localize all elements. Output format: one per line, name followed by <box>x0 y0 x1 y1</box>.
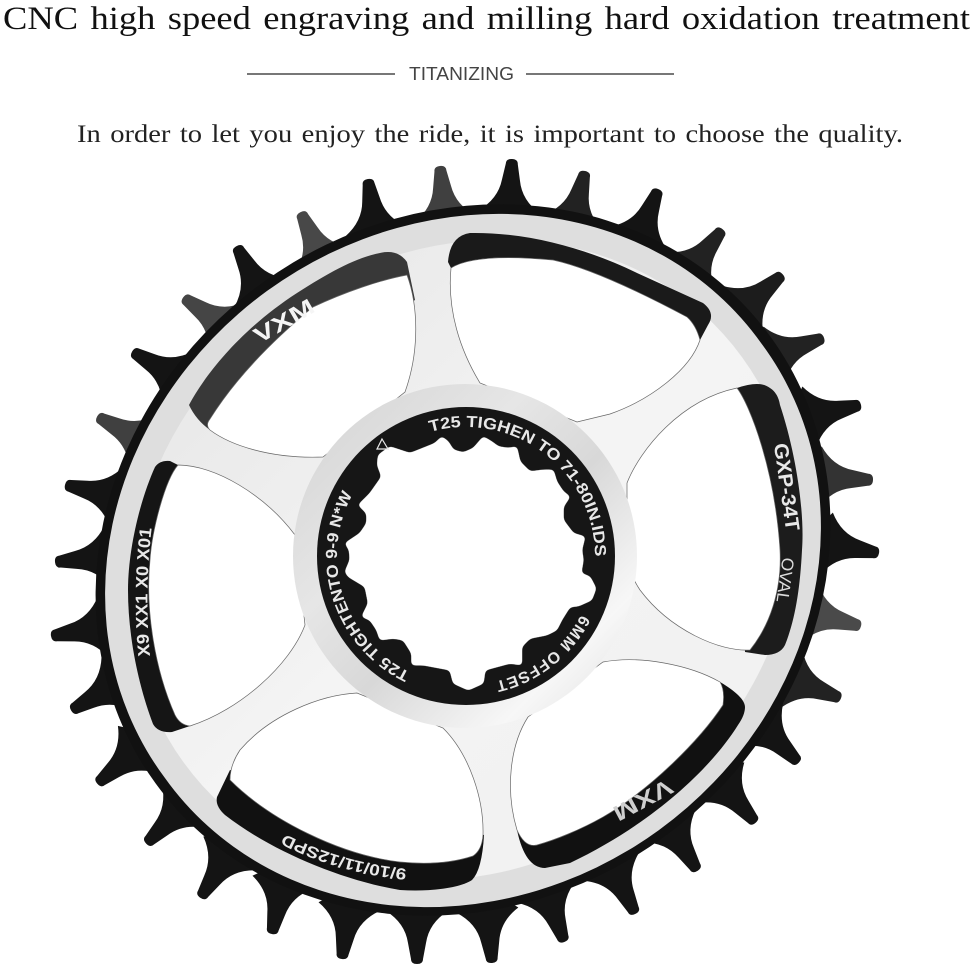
silver rim <box>105 214 821 907</box>
chainring <box>50 159 880 964</box>
window: top right <box>448 233 711 422</box>
title: CNC high speed engraving and milling hard oxidation treatment <box>3 1 970 37</box>
subtitle: In order to let you enjoy the ride, it is important to choose the quality. <box>77 121 903 148</box>
silver spokes face <box>131 240 795 880</box>
window: upper left <box>189 252 416 457</box>
logo: upper left: VXM <box>249 294 319 348</box>
window: left <box>128 461 305 732</box>
hub text: torque metric: T25 TIGHTENTO 9-9 N*W <box>326 490 407 682</box>
window: right <box>627 384 803 655</box>
window: bottom left <box>217 693 484 891</box>
icon: alignment triangle <box>377 439 388 449</box>
outer black ring <box>96 204 830 916</box>
hub silver ring <box>293 384 637 728</box>
window: lower right <box>510 660 745 868</box>
label: GXP-34T: GXP-34T <box>769 442 803 532</box>
teeth <box>46 157 885 966</box>
hub text: offset: 6MM OFFSET <box>498 616 590 692</box>
hub black disc <box>317 407 615 705</box>
section label: titanizing: TITANIZING <box>409 64 514 84</box>
hub text: torque: T25 TIGHEN TO 71-80IN.IDS <box>428 416 606 556</box>
label: speeds: 9/10/11/12SPD <box>282 836 406 880</box>
logo: lower right: VXM <box>609 774 677 826</box>
hub splined hole <box>345 437 596 690</box>
label: drivetrain compatibility: X9 XX1 X0 X01 <box>136 528 152 656</box>
label: OVAL: OVAL <box>772 556 798 604</box>
